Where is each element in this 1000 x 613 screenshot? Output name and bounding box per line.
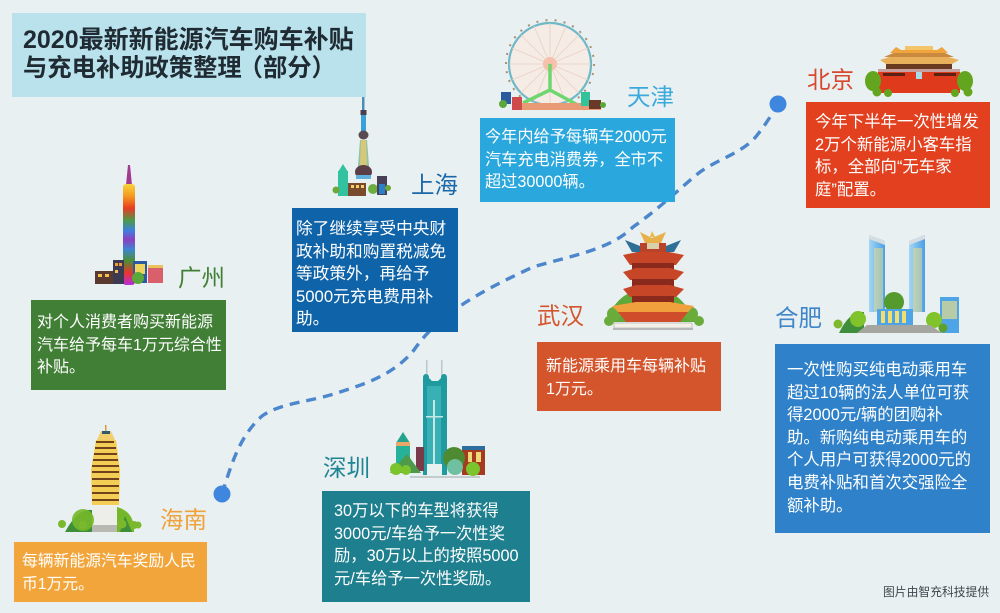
city name: 海南: 海南: [160, 507, 207, 533]
panel: 北京: 2万个新能源小客车指: [815, 136, 972, 154]
icon: Shenzhen Diwang tower: [390, 360, 485, 478]
title: 2020最新新能源汽车购车补贴 与充电补助政策整理（部分）: [23, 26, 354, 82]
panel: 北京: 今年下半年一次性增发: [815, 113, 979, 131]
panel: 天津: [480, 118, 675, 202]
city name: 广州: 广州: [178, 265, 225, 291]
panel: 武汉: [537, 342, 721, 411]
panel: 天津: 超过30000辆。: [485, 173, 595, 191]
route dashed line: [214, 96, 786, 502]
city name: 上海: 上海: [411, 172, 458, 198]
panel: 深圳: [322, 491, 530, 602]
panel: 合肥: 额补助。: [787, 497, 853, 515]
panel: 武汉: 新能源乘用车每辆补贴: [546, 358, 706, 375]
panel: 深圳: 励，30万以上的按照5000: [334, 547, 519, 565]
panel: 天津: 汽车充电消费券，全市不: [485, 151, 663, 169]
icon: Hefei twin towers: [834, 235, 959, 333]
icon: Tiananmen gate: [865, 46, 973, 97]
panel: 北京: 标，全部向“无车家: [815, 158, 952, 176]
panel: 广州: 补贴。: [37, 359, 85, 376]
panel: 合肥: 一次性购买纯电动乘用车: [787, 361, 967, 379]
icon: Oriental Pearl Tower: [332, 97, 391, 196]
icon: Tianjin Ferris wheel: [499, 20, 606, 110]
city name: 天津: 天津: [627, 84, 674, 110]
city name: 合肥: 合肥: [775, 305, 822, 331]
panel: 合肥: [775, 344, 990, 533]
panel: 上海: [292, 208, 458, 332]
image credit: 图片由智充科技提供: [883, 585, 989, 599]
icon: Canton Tower: [95, 165, 163, 285]
panel: 海南: [14, 542, 207, 602]
panel: 深圳: 30万以下的车型将获得: [334, 502, 499, 520]
panel: 武汉: 1万元。: [546, 381, 603, 398]
panel: 北京: 庭”配置。: [815, 181, 886, 199]
panel: 上海: 政补助和购置税减免: [296, 242, 446, 261]
city name: 武汉: 武汉: [537, 303, 584, 329]
city name: 深圳: 深圳: [323, 455, 370, 481]
panel: 合肥: 得2000元/辆的团购补: [787, 406, 943, 424]
panel: 北京: [806, 102, 990, 208]
icon: Hainan pagoda: [58, 425, 142, 532]
panel: 深圳: 元/车给予一次性奖励。: [334, 570, 501, 588]
panel: 海南: 每辆新能源汽车奖励人民: [22, 553, 196, 570]
panel: 深圳: 3000元/车给予一次性奖: [334, 525, 505, 543]
panel: 广州: 对个人消费者购买新能源: [37, 314, 213, 331]
panel: 广州: 汽车给予每车1万元综合性: [37, 337, 222, 354]
panel: 合肥: 个人用户可获得2000元的: [787, 451, 971, 469]
panel: 上海: 5000元充电费用补: [296, 287, 433, 306]
icon: Yellow Crane Tower: [604, 231, 704, 330]
panel: 海南: 币1万元。: [22, 576, 94, 593]
panel: 天津: 今年内给予每辆车2000元: [485, 128, 667, 146]
panel: 上海: 除了继续享受中央财: [296, 219, 446, 238]
title: [12, 13, 366, 97]
city name: 北京: 北京: [807, 67, 854, 93]
panel: 合肥: 助。新购纯电动乘用车的: [787, 429, 967, 447]
panel: 上海: 助。: [296, 309, 329, 328]
panel: 广州: [31, 300, 226, 390]
panel: 合肥: 电费补贴和首次交强险全: [787, 474, 967, 492]
panel: 合肥: 超过10辆的法人单位可获: [787, 384, 969, 402]
panel: 上海: 等政策外，再给予: [296, 264, 430, 283]
